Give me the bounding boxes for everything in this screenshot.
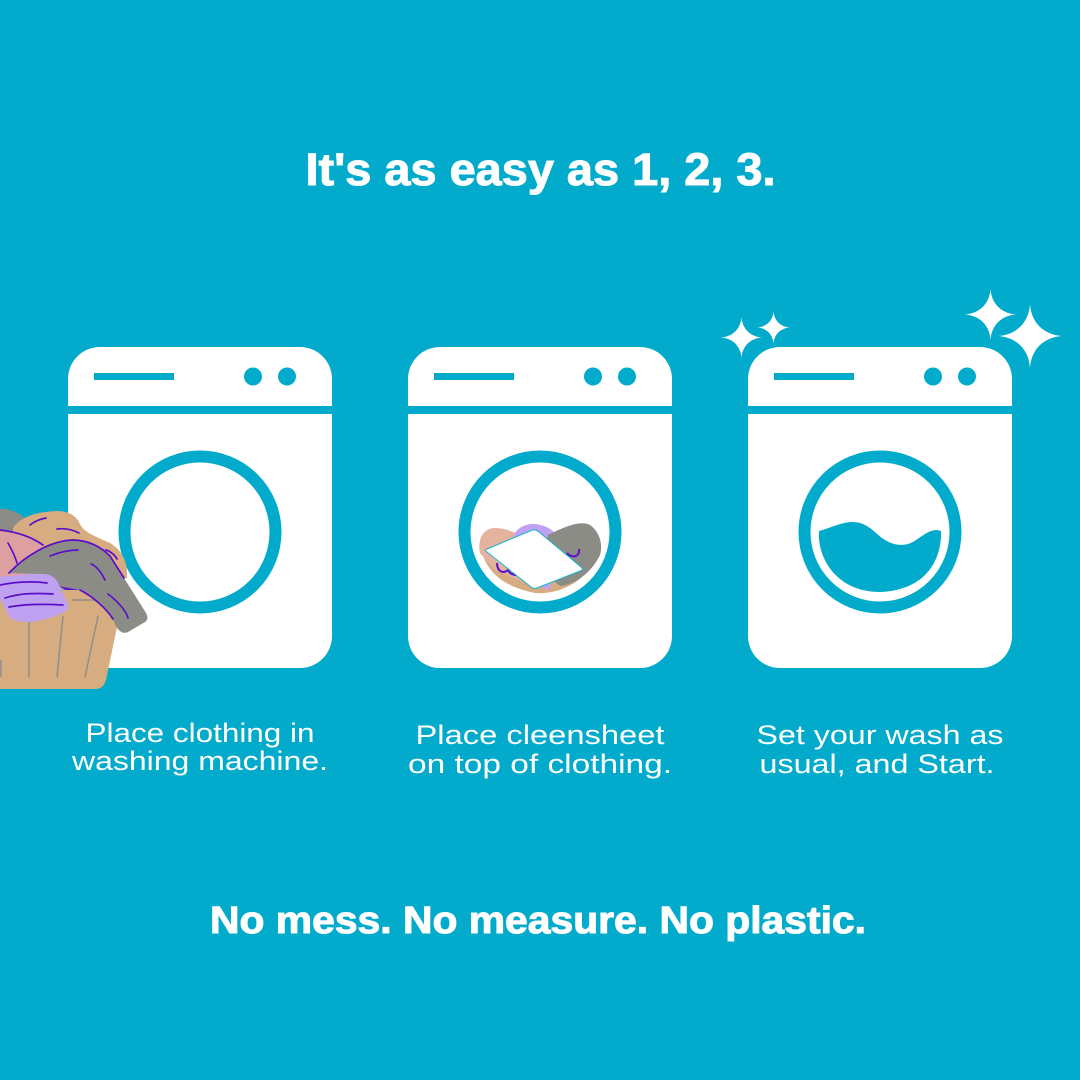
icon: water wave in drum (819, 522, 941, 592)
icon: laundry basket (0, 509, 147, 689)
caption: step 3 (756, 720, 1004, 779)
icon: cleensheet on clothing (479, 523, 601, 593)
caption: step 2: Place cleensheet (416, 720, 665, 750)
step 3: washing machine (748, 347, 1012, 668)
caption: step 3: usual, and Start. (760, 749, 994, 779)
step 2: washing machine (408, 347, 672, 668)
caption: step 2: on top of clothing. (408, 749, 672, 779)
caption: step 1: washing machine. (71, 746, 328, 776)
title: It's as easy as 1, 2, 3. (306, 144, 776, 195)
step 1: washing machine (68, 347, 332, 668)
caption: step 3: Set your wash as (756, 720, 1004, 750)
caption: step 1: Place clothing in (86, 718, 314, 748)
caption: step 2 (408, 720, 672, 779)
closing tagline: No mess. No measure. No plastic. (210, 900, 866, 942)
icon: sparkles left (721, 311, 790, 358)
icon: sparkles right (965, 289, 1062, 368)
caption: step 1 (71, 718, 328, 776)
